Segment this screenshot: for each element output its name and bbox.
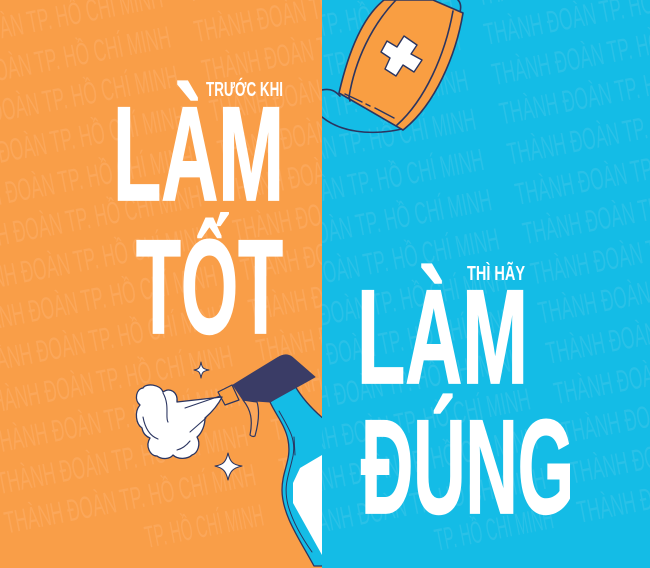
bottle highlight lines bbox=[279, 411, 312, 552]
sparkle small bbox=[194, 362, 209, 378]
mask pleats bbox=[349, 0, 453, 125]
watermark: left panel: TP. HỒ CHÍ MINH bbox=[142, 497, 266, 555]
nozzle collar bbox=[218, 385, 239, 405]
watermark: left panel: THÀNH ĐOÀN TP. HỒ CHÍ MINH bbox=[0, 417, 251, 501]
spray cloud bbox=[136, 385, 222, 459]
bottle label bbox=[293, 455, 322, 555]
mask ear loops bbox=[322, 0, 461, 132]
bottle body bbox=[270, 388, 322, 567]
spray cloud detail lines bbox=[143, 393, 220, 450]
mask cross bbox=[381, 36, 422, 76]
panel: blue right background bbox=[322, 0, 650, 568]
spray head bbox=[233, 355, 315, 402]
watermark: left panel: THÀNH ĐOÀN TP. HỒ CHÍ MINH bbox=[1, 456, 259, 540]
watermark: right panel bbox=[322, 0, 650, 550]
big heading: LÀM (left): LÀM bbox=[113, 80, 284, 229]
trigger bbox=[243, 400, 258, 436]
big heading: TỐT: TỐT bbox=[136, 212, 283, 362]
icon: face mask bbox=[322, 0, 463, 132]
watermark: left panel bbox=[0, 0, 322, 547]
small heading: TRƯỚC KHI: TRƯỚC KHI bbox=[206, 77, 283, 101]
mask stitching bbox=[345, 94, 394, 118]
mask body bbox=[339, 0, 463, 130]
big heading: LÀM (right): LÀM bbox=[357, 263, 528, 412]
panel: orange left background bbox=[0, 0, 322, 568]
small heading: THÌ HÃY: THÌ HÃY bbox=[467, 262, 525, 285]
sparkle large bbox=[215, 453, 242, 480]
icon: spray bottle bbox=[136, 355, 330, 566]
